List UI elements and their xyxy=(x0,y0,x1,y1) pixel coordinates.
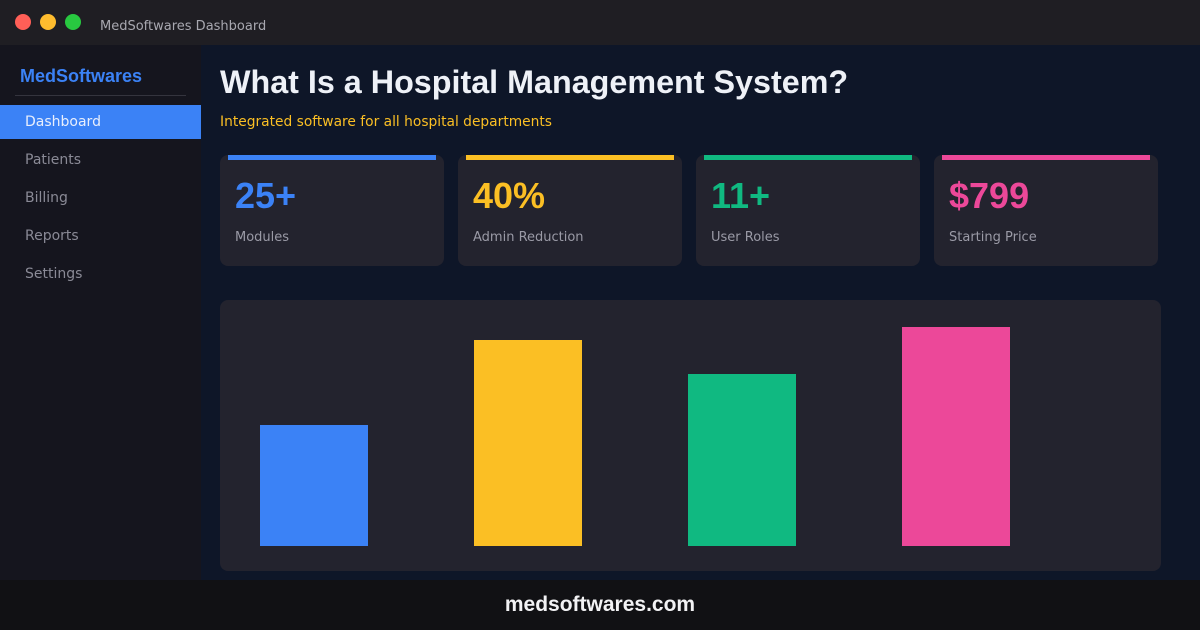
window title: MedSoftwares Dashboard xyxy=(100,19,266,34)
card: modules: Modules xyxy=(235,230,289,245)
card: starting price: $799 xyxy=(949,175,1029,216)
bar: admin reduction xyxy=(474,340,582,546)
nav items: Patients xyxy=(25,152,81,168)
heading: What Is a Hospital Management System? xyxy=(220,64,848,100)
card: user roles xyxy=(696,155,920,266)
bar: modules xyxy=(260,425,368,546)
card: starting price xyxy=(934,155,1158,266)
bar: starting price xyxy=(902,327,1010,546)
nav items: Settings xyxy=(25,266,82,282)
card: user roles: 11+ xyxy=(711,175,770,216)
bar: user roles xyxy=(688,374,796,546)
card: modules xyxy=(220,155,444,266)
window buttons xyxy=(15,14,81,30)
card: admin reduction xyxy=(458,155,682,266)
nav items xyxy=(0,105,201,282)
logo: MedSoftwares xyxy=(20,66,142,86)
nav items: Reports xyxy=(25,228,79,244)
nav items: Billing xyxy=(25,190,68,206)
bar chart xyxy=(220,300,1161,571)
card: starting price: Starting Price xyxy=(949,230,1037,245)
subtitle: Integrated software for all hospital departments xyxy=(220,114,552,130)
footer xyxy=(0,580,1200,630)
card: user roles: User Roles xyxy=(711,230,780,245)
sidebar xyxy=(0,45,201,580)
footer: medsoftwares.com xyxy=(505,593,695,616)
card: admin reduction: Admin Reduction xyxy=(473,230,584,245)
card: admin reduction: 40% xyxy=(473,175,545,216)
title bar xyxy=(0,0,1200,45)
card: modules: 25+ xyxy=(235,175,296,216)
nav items: Dashboard xyxy=(25,114,101,130)
stat cards xyxy=(220,155,1158,266)
